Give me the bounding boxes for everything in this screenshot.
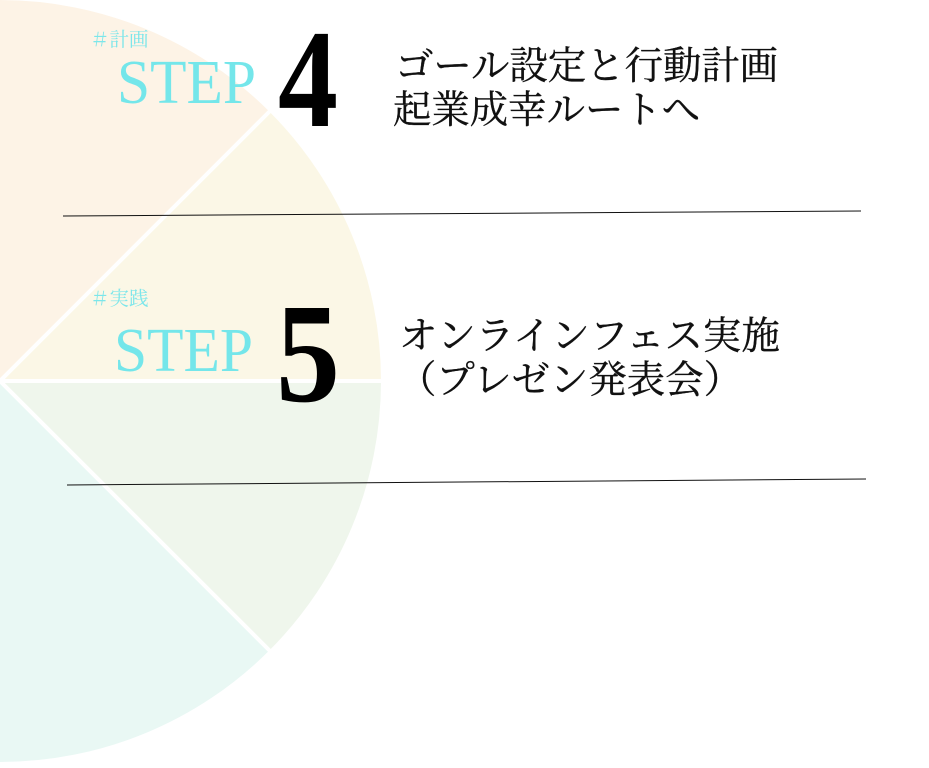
step 5 heading line 2: （プレゼン発表会） [398, 360, 742, 402]
step 4 number: 4 [278, 2, 338, 157]
step 5 label: STEP [114, 317, 253, 385]
step 4 label: STEP [117, 49, 256, 117]
step 4 heading: ゴール設定と行動計画 [395, 46, 778, 88]
pie sector: upper right [0, 112, 381, 381]
tag: practice: ＃実践 [90, 288, 149, 310]
pie chart background [0, 0, 383, 762]
tag: planning: ＃計画 [90, 29, 149, 51]
pie sector: bottom [0, 381, 269, 762]
step 5 block [90, 274, 780, 432]
step 5 number: 5 [276, 274, 340, 432]
pie sector: lower right [0, 381, 381, 650]
pie sector: top [0, 0, 269, 381]
step 5 heading: オンラインフェス実施 [399, 316, 780, 358]
step 4 heading line 2: 起業成幸ルートへ [393, 90, 700, 132]
divider 1 [63, 211, 861, 216]
divider 2 [67, 479, 866, 485]
step 4 block [90, 2, 778, 157]
